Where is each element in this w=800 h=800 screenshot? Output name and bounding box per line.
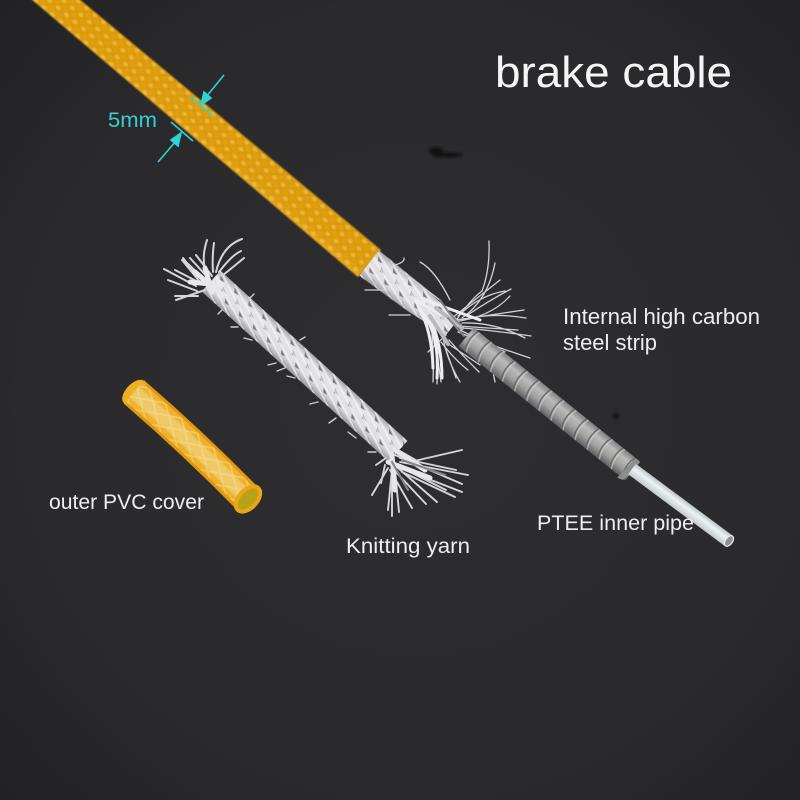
yarn edge fuzz xyxy=(218,294,376,452)
silver knitting yarn braid xyxy=(164,239,468,516)
yarn frayed upper end xyxy=(164,239,244,300)
title: brake cable xyxy=(495,48,732,97)
exposed silver braid on cable xyxy=(359,241,531,384)
label: PTEE inner pipe: PTEE inner pipe xyxy=(537,512,694,535)
label: internal steel strip: steel strip xyxy=(563,330,657,355)
5mm dimension marker xyxy=(108,75,224,162)
label: internal steel strip: Internal high carbon xyxy=(563,304,760,329)
yellow braided brake cable xyxy=(30,0,381,277)
label: outer PVC cover: outer PVC cover xyxy=(49,491,204,514)
dimension arrows xyxy=(158,75,224,162)
dark smudge marks xyxy=(429,147,620,418)
5mm label: 5mm xyxy=(108,109,157,132)
PVC tube opening xyxy=(231,482,265,516)
PTFE inner pipe xyxy=(628,464,735,548)
outer PVC cover tube xyxy=(118,376,265,516)
yarn frayed lower end xyxy=(372,450,468,516)
steel strip coil xyxy=(457,328,640,483)
label: knitting yarn: Knitting yarn xyxy=(346,535,470,558)
frayed braid strands on cable xyxy=(365,241,531,384)
